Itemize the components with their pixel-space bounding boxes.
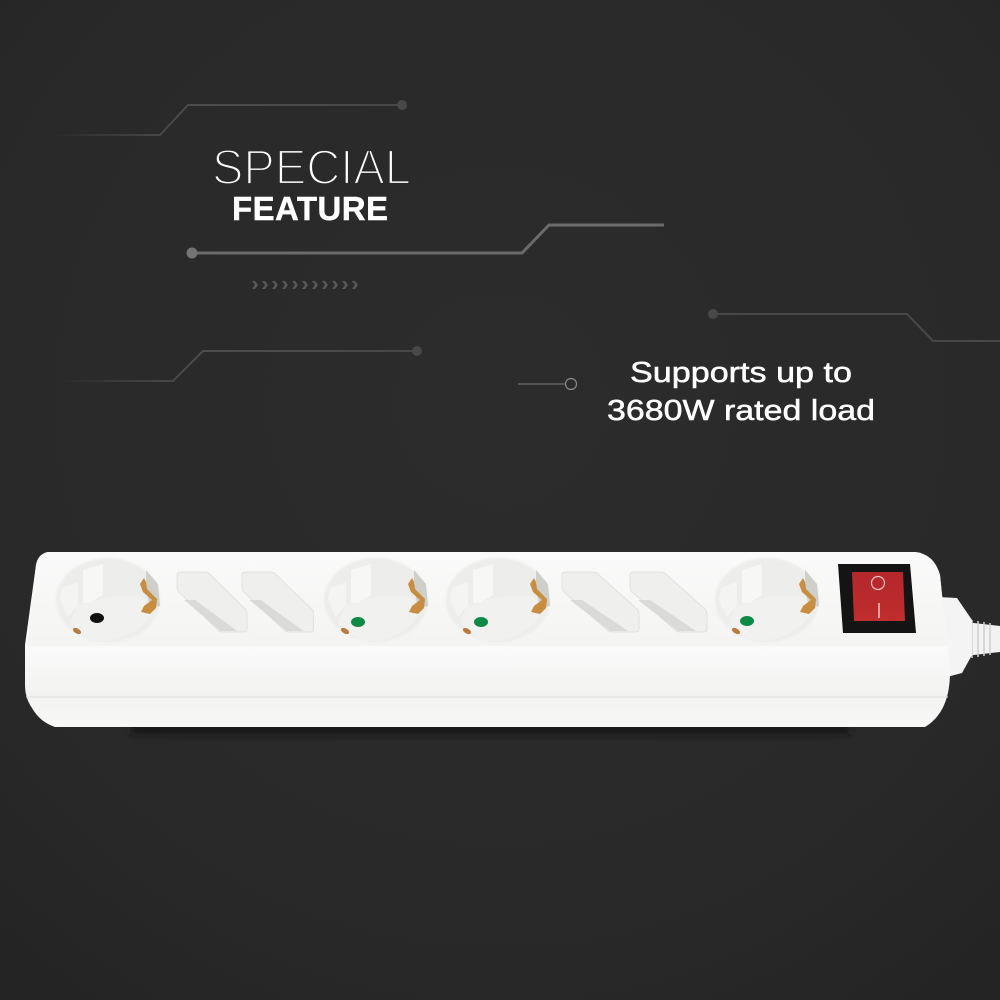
socket hole [351,617,365,627]
strip shadow [130,726,850,734]
circuit line: upper right [708,309,1000,341]
socket hole [474,617,488,627]
circuit line: middle left [65,346,422,381]
chevron row [252,281,358,289]
power cable [938,597,1000,677]
heading: FEATURE: FEATURE [232,190,388,227]
socket 4 [715,558,819,642]
socket hole [90,613,104,623]
circuit line: upper left [50,100,407,135]
socket 3 [446,558,550,642]
callout pointer [518,378,576,390]
heading: SPECIAL: SPECIAL [212,141,411,195]
callout text [607,357,875,427]
socket hole [740,616,754,626]
callout text: Supports up to [630,357,852,389]
circuit line: below heading [186,225,664,258]
socket 2 [324,558,428,642]
flat slots [177,572,707,632]
strip body [25,552,950,727]
power strip [25,552,1000,734]
rocker switch [838,564,916,633]
socket 1 [56,558,160,642]
callout text: 3680W rated load [607,395,875,427]
heading [212,141,411,227]
